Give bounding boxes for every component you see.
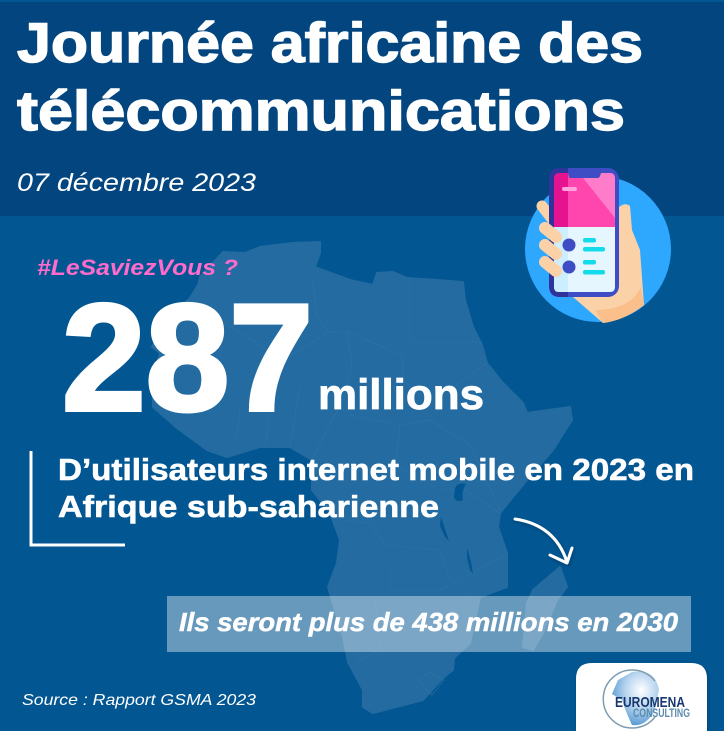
- hashtag: #LeSaviezVous ?: [37, 255, 238, 280]
- map: Africa: [152, 242, 572, 713]
- bracket: [31, 451, 125, 545]
- callout text: Ils seront plus de 438 millions en 2030: [179, 607, 679, 637]
- description: [58, 452, 694, 524]
- band: 2030 callout background: [167, 596, 691, 652]
- description: D’utilisateurs internet mobile en 2023 en: [58, 452, 694, 487]
- map: country borders: [186, 277, 505, 695]
- title: télécommunications: [17, 79, 625, 142]
- date: 07 décembre 2023: [17, 169, 256, 197]
- logo card: EUROMENA: [615, 694, 685, 711]
- logo card: [576, 663, 707, 731]
- description: Afrique sub-saharienne: [58, 489, 439, 524]
- panel: header band: [0, 2, 724, 216]
- arrow: [515, 519, 572, 563]
- icon: hand holding smartphone: [525, 168, 671, 323]
- source: Source : Rapport GSMA 2023: [22, 692, 256, 709]
- title: Journée africaine des: [17, 11, 643, 74]
- big number: 287: [62, 273, 313, 443]
- map: lakes: [440, 484, 473, 574]
- unit: millions: millions: [318, 371, 484, 419]
- map: Madagascar: [523, 567, 567, 650]
- logo card: CONSULTING: [633, 706, 690, 720]
- title: [17, 11, 643, 142]
